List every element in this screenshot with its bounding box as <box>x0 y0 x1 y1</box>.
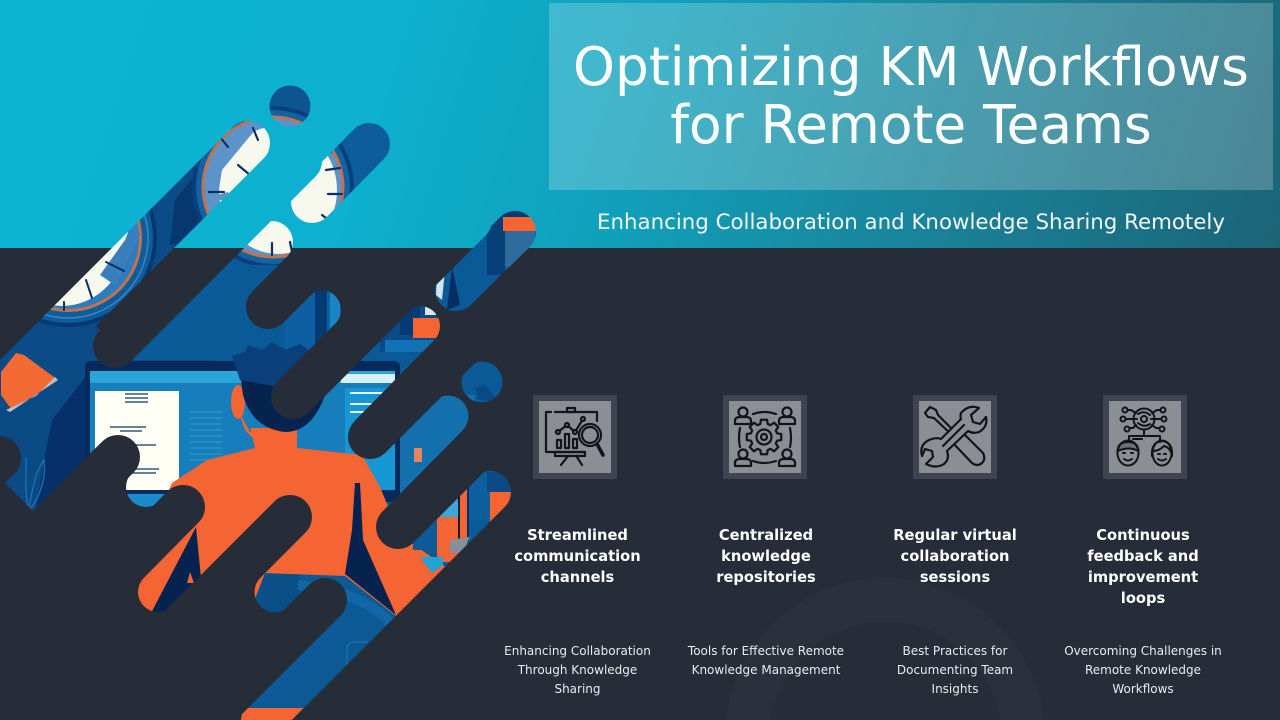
icon: presentation board with chart and magnifier <box>533 395 617 479</box>
description: column 4: Overcoming Challenges in <box>1064 644 1222 658</box>
wall clock right <box>192 106 354 265</box>
bottom orange strip <box>241 708 304 720</box>
wall clock left <box>38 208 157 327</box>
top-right band scene <box>436 205 540 315</box>
lamp <box>1 353 58 412</box>
chair <box>256 574 393 665</box>
description: column 3: Documenting Team <box>897 662 1013 676</box>
title <box>573 36 1249 156</box>
person: shirt <box>125 428 450 625</box>
heading: column 2 <box>716 526 816 586</box>
title: Optimizing KM Workflows <box>573 36 1249 98</box>
description: column 1: Through Knowledge <box>518 662 637 676</box>
description: column 1: Enhancing Collaboration <box>504 644 651 658</box>
description: column 4 <box>1064 644 1222 696</box>
title panel <box>549 3 1273 190</box>
title: for Remote Teams <box>670 94 1152 156</box>
subtitle: Enhancing Collaboration and Knowledge Sharing Remotely <box>597 210 1225 235</box>
icon: crossed wrench and screwdriver <box>913 395 997 479</box>
plant <box>25 458 46 509</box>
person: head and hair <box>231 342 325 445</box>
heading: column 2: knowledge <box>721 548 811 565</box>
lower wall <box>132 265 278 360</box>
heading: column 1 <box>514 526 641 586</box>
arm gaps <box>150 483 396 615</box>
heading: column 3: sessions <box>920 569 990 586</box>
heading: column 3: Regular virtual <box>893 526 1017 544</box>
heading: column 4: improvement <box>1088 569 1198 586</box>
heading: column 4: Continuous <box>1096 526 1190 544</box>
window scene bottom right <box>413 470 515 573</box>
illustration: person at monitor seen through diagonal capsules <box>0 86 536 720</box>
building window <box>315 290 340 344</box>
description: column 3: Best Practices for <box>903 644 1007 658</box>
description: column 2 <box>688 644 844 676</box>
heading: column 1: Streamlined <box>527 526 628 544</box>
right side wall details <box>400 385 496 494</box>
heading: column 2: Centralized <box>719 526 813 544</box>
description: column 2: Knowledge Management <box>692 662 840 676</box>
description: column 4: Remote Knowledge <box>1085 662 1201 676</box>
heading: column 4 <box>1087 526 1199 607</box>
heading: column 4: feedback and <box>1087 548 1199 565</box>
heading: column 3: collaboration <box>901 548 1009 565</box>
wall base <box>215 258 502 574</box>
heading: column 3 <box>893 526 1017 586</box>
heading: column 1: channels <box>541 569 614 586</box>
heading: column 1: communication <box>514 548 641 565</box>
monitor <box>85 361 400 507</box>
header background band <box>0 0 1280 248</box>
description: column 1: Sharing <box>554 682 601 696</box>
description: column 3: Insights <box>932 682 978 696</box>
icon: gear with people <box>723 395 807 479</box>
heading: column 2: repositories <box>716 569 816 586</box>
description: column 3 <box>897 644 1013 696</box>
description: column 4: Workflows <box>1112 682 1174 696</box>
description: column 2: Tools for Effective Remote <box>688 644 844 658</box>
background ring <box>700 560 1080 720</box>
circle top piece <box>265 80 315 130</box>
icon: network and two people <box>1103 395 1187 479</box>
heading: column 4: loops <box>1121 590 1165 607</box>
shelf with orange box <box>380 306 440 352</box>
description: column 1 <box>504 644 651 696</box>
